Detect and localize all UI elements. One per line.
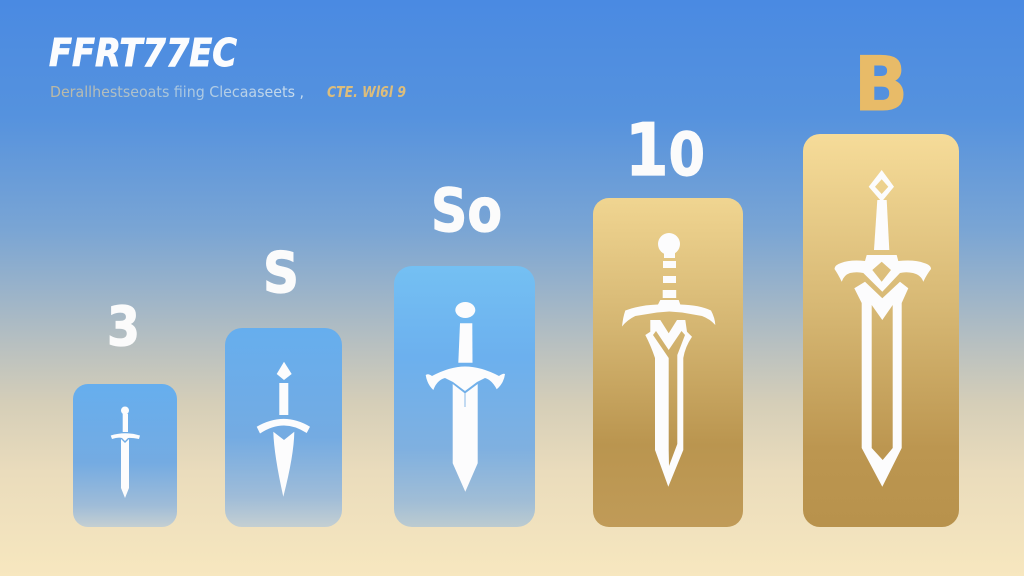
card — [394, 266, 535, 527]
panel: tier 2 — [225, 241, 342, 527]
panel: tier 1 — [73, 295, 177, 527]
icon: long sword — [622, 233, 715, 487]
card — [225, 328, 342, 527]
icon: great sword — [834, 170, 931, 487]
title: FFRT77EC — [49, 31, 237, 75]
value label: 10: 10 — [625, 108, 705, 192]
value label: S: S — [263, 241, 299, 306]
subtitle right text: CTE. Wl6l 9 — [327, 83, 406, 101]
icon: small sword — [111, 406, 140, 498]
panel: tier 3 — [394, 176, 535, 527]
value label: 3: 3 — [107, 295, 140, 358]
subtitle left text: Derallhestseoats fiing Clecaaseets , — [50, 83, 304, 101]
card — [593, 198, 743, 527]
panel: tier 5 — [803, 40, 959, 527]
card — [73, 384, 177, 527]
card — [803, 134, 959, 527]
icon: short sword — [426, 302, 505, 492]
icon: dagger — [257, 362, 310, 497]
value label: B: B — [854, 40, 908, 128]
subtitle — [50, 83, 406, 101]
panel: tier 4 — [593, 108, 743, 527]
value label: So: So — [431, 176, 502, 246]
